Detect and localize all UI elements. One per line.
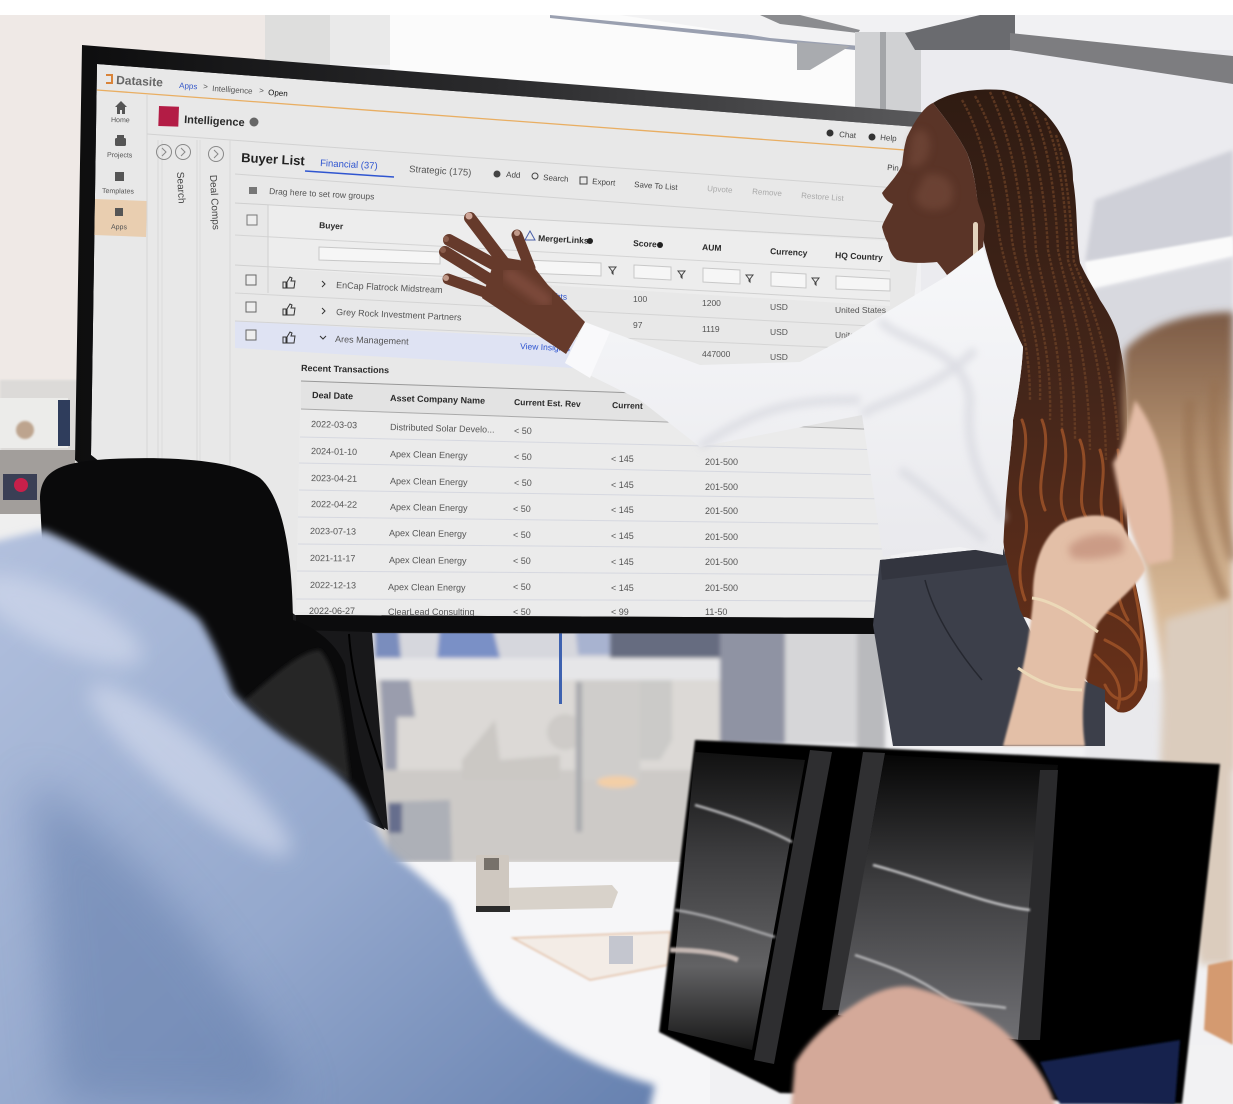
presenter: face highlights (908, 130, 953, 210)
recent transactions table: < 50 (513, 556, 531, 566)
presenter: trousers (873, 547, 1105, 746)
buyer rows: EnCap Flatrock Midstream (336, 280, 443, 295)
recent transactions table: Apex Clean Energy (390, 449, 468, 461)
right edge: seated woman's hand (1204, 960, 1233, 1045)
recent transactions table: < 50 (513, 582, 531, 592)
sidebar: Templates (102, 188, 134, 196)
seated woman: knuckles (1068, 534, 1124, 559)
buyer list tabs and toolbar: Remove (752, 187, 783, 198)
table header row: HQ Country (835, 250, 883, 263)
recent transactions table: 201-500 (705, 583, 738, 593)
recent transactions table: Apex Clean Energy (390, 502, 468, 513)
blue cable (559, 632, 562, 704)
recent transactions table: Distributed Solar Develo... (390, 422, 495, 435)
intelligence title: Intelligence (184, 114, 245, 129)
buyer list tabs and toolbar: Strategic (175) (409, 164, 472, 179)
header logo and breadcrumb: Intelligence (212, 84, 253, 96)
foreground person: shirt highlight folds (0, 557, 308, 875)
buyer rows: 1200 (702, 298, 721, 308)
recent transactions table: Apex Clean Energy (388, 582, 466, 593)
header logo and breadcrumb: Open (268, 88, 288, 98)
buyer rows: 447000 (702, 349, 731, 359)
buyer rows: USD (770, 352, 788, 362)
presenter: braided hair mass (933, 90, 1148, 713)
recent transactions table: < 145 (611, 583, 634, 593)
recent transactions table: Current Est. Rev (514, 397, 581, 409)
buyer list tabs and toolbar: Buyer List (241, 150, 306, 168)
recent transactions table: 201-500 (705, 482, 738, 492)
header logo and breadcrumb: Apps (179, 81, 198, 91)
table clutter: phone stand and tray (476, 855, 618, 912)
recent transactions table: Recent Transactions (301, 363, 389, 375)
table header row: Currency (770, 246, 808, 258)
intelligence title: Chat (839, 130, 857, 140)
collapsed panels: Search (174, 172, 187, 204)
buyer list tabs and toolbar: Restore List (801, 191, 845, 203)
recent transactions table: 2022-03-03 (311, 419, 357, 430)
buyer list tabs and toolbar (235, 153, 898, 222)
table header row (235, 203, 890, 306)
header logo and breadcrumb: Datasite (116, 73, 164, 89)
recent transactions table: Apex Clean Energy (389, 528, 467, 539)
buyer rows: 100 (633, 294, 647, 304)
seated woman: face (1113, 400, 1173, 565)
buyer rows: 1119 (702, 324, 720, 334)
recent transactions table: 2022-12-13 (310, 580, 356, 590)
recent transactions table: 201-500 (705, 532, 738, 542)
laptop (659, 740, 1220, 1104)
presenter: cuff (565, 322, 610, 378)
buyer list tabs and toolbar: Save To List (634, 180, 679, 192)
buyer rows: USD (770, 327, 788, 337)
sidebar (94, 101, 147, 237)
buyer rows: Ares Management (335, 334, 409, 347)
recent transactions table: < 50 (513, 504, 531, 514)
black office chair (40, 458, 388, 830)
table header row: MergerLinks (538, 233, 589, 246)
recent transactions table: < 145 (611, 505, 634, 515)
seated woman: blouse (1160, 600, 1233, 965)
header logo and breadcrumb (106, 73, 288, 98)
orange rule (97, 90, 905, 150)
presenter: braid strands (962, 92, 1118, 460)
room behind the monitor (370, 620, 1233, 864)
sidebar: Apps (111, 224, 128, 231)
recent transactions table: Current (612, 400, 643, 411)
buyer rows: 97 (633, 320, 643, 330)
seated woman: hair (1123, 312, 1233, 770)
recent transactions table: < 50 (513, 530, 531, 540)
seated woman: arm and hand (1003, 516, 1145, 746)
recent transactions table: Deal Date (312, 390, 353, 401)
table header row: AUM (702, 242, 722, 253)
buyer list tabs and toolbar: Search (543, 173, 569, 184)
recent transactions table: 2022-06-27 (309, 606, 355, 616)
recent transactions table: 11-50 (705, 607, 727, 617)
table (370, 862, 1233, 1104)
recent transactions table: Asset Company Name (390, 393, 485, 406)
buyer list tabs and toolbar: Upvote (707, 184, 733, 195)
presenter: earring (973, 222, 978, 262)
foreground person: blue shirt (0, 530, 655, 1104)
recent transactions table: 2022-04-22 (311, 499, 357, 510)
buyer rows (235, 275, 890, 372)
recent transactions table: < 145 (611, 531, 634, 541)
table header row: Buyer (319, 220, 344, 231)
collapsed panels (156, 140, 230, 480)
presenter: white blouse with outstretched arm (565, 247, 1023, 557)
recent transactions table: < 145 (611, 480, 634, 490)
row group bar: Drag here to set row groups (269, 186, 375, 202)
foreground person: shirt shadow (30, 780, 300, 1104)
buyer rows: United States (835, 330, 886, 340)
recent transactions table: Apex Clean Energy (390, 476, 468, 487)
recent transactions table: < 50 (514, 452, 532, 462)
buyer list tabs and toolbar: Financial (37) (320, 158, 378, 172)
header logo and breadcrumb: > (259, 86, 264, 95)
recent transactions table: < 50 (514, 478, 532, 488)
monitor lower bezel (296, 612, 885, 634)
sidebar: Home (111, 117, 130, 124)
recent transactions table: 2024-01-10 (311, 446, 357, 457)
recent transactions table: < 145 (611, 557, 634, 567)
recent transactions table: 2023-04-21 (311, 473, 357, 484)
recent transactions table: Apex Clean Energy (389, 555, 467, 566)
buyer rows: USD (770, 302, 788, 312)
seated woman: bracelets (1018, 598, 1098, 690)
recent transactions table: 2023-07-13 (310, 526, 356, 537)
monitor bezel (75, 45, 932, 634)
intelligence title: Help (880, 133, 897, 143)
presenter: raised hand (440, 212, 585, 354)
recent transactions table: 201-500 (705, 557, 738, 567)
sidebar: Projects (107, 152, 133, 159)
table clutter: tablet (513, 932, 670, 980)
foreground person: hand on laptop (790, 986, 1060, 1104)
presenter: blouse folds (700, 320, 1003, 540)
buyer list tabs and toolbar: Add (506, 170, 521, 180)
recent transactions table (296, 363, 890, 618)
buyer rows: ights (549, 291, 567, 302)
header logo and breadcrumb: > (203, 82, 208, 91)
seated woman: hair strands (1189, 380, 1233, 600)
recent transactions table: < 50 (514, 426, 532, 436)
buyer list tabs and toolbar: Pin (887, 163, 899, 173)
presenter: wavy curled hair ends (1020, 420, 1142, 708)
buyer rows: United States (835, 305, 886, 315)
recent transactions table: < 99 (611, 607, 629, 617)
recent transactions table: 201-500 (705, 506, 738, 516)
collapsed panels: Deal Comps (207, 175, 221, 230)
recent transactions table: < 50 (513, 607, 531, 617)
monitor screen: Datasite Intelligence app (91, 64, 930, 618)
buyer rows: Grey Rock Investment Partners (336, 307, 462, 322)
recent transactions table: 2021-11-17 (310, 553, 355, 563)
recent transactions table: < 145 (611, 454, 634, 464)
intelligence title (158, 106, 897, 143)
buyer rows: View Insights (520, 341, 570, 353)
recent transactions table: ClearLead Consulting (388, 607, 475, 617)
presenter: face and neck (882, 103, 985, 275)
recent transactions table: 201-500 (705, 457, 738, 467)
table header row: Score (633, 238, 657, 249)
buyer list tabs and toolbar: Export (592, 177, 616, 188)
